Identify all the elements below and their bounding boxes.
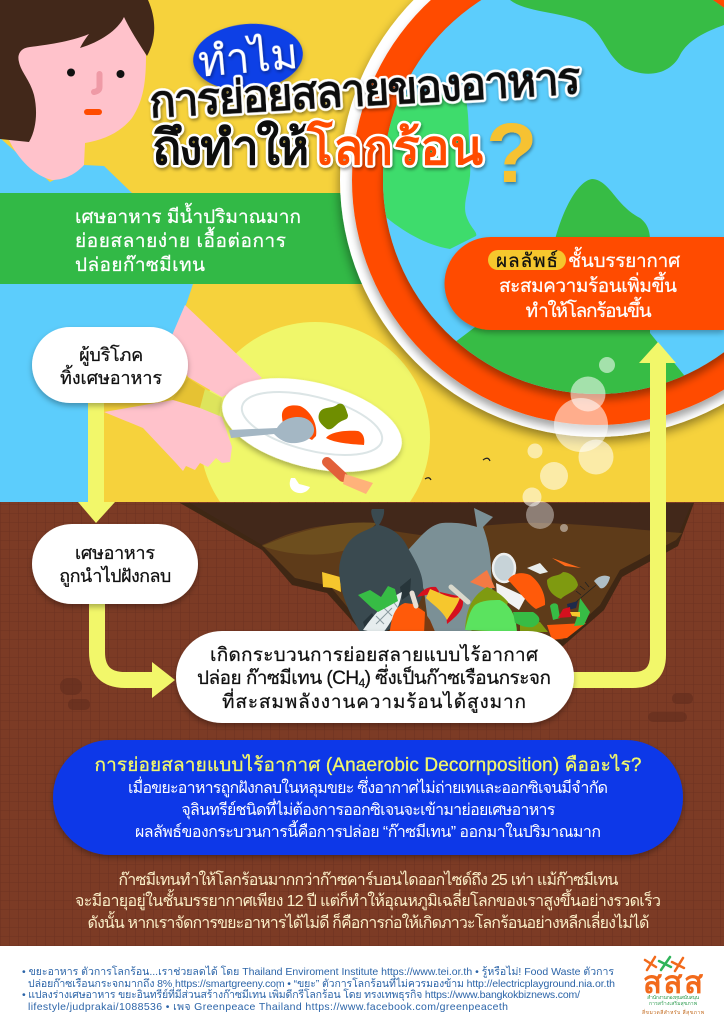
food: orange piece xyxy=(326,431,364,445)
garbage pile xyxy=(322,508,610,640)
text: landfill xyxy=(59,543,171,587)
band: green text panel xyxy=(0,193,370,284)
green veg xyxy=(550,598,590,626)
logo stars xyxy=(645,957,684,971)
heading: การย่อยสลายแบบไร้อากาศ (Anaerobic Decornposition) คืออะไร? xyxy=(94,754,642,776)
title line 2 xyxy=(152,119,483,175)
black garbage bag xyxy=(339,509,423,634)
text: food waste description: เศษอาหาร มีน้ำปริมาณมาก xyxy=(75,203,301,228)
text: result: สะสมความร้อนเพิ่มขึ้น xyxy=(499,272,677,297)
body: ผลลัพธ์ของกระบวนการนี้คือการปล่อย “ก๊าซมีเทน” ออกมาในปริมาณมาก xyxy=(135,820,601,841)
apple core xyxy=(426,589,460,620)
text: anaerobic process: ปล่อย ก๊าซมีเทน (CH xyxy=(197,668,359,689)
green leaf xyxy=(358,586,398,612)
face and neck xyxy=(0,16,146,180)
title pill: why xyxy=(190,19,306,95)
grey garbage bag xyxy=(408,508,493,640)
can lid xyxy=(493,554,515,582)
pit brown interior xyxy=(262,523,682,640)
olive lump xyxy=(465,587,508,632)
fish tail xyxy=(400,578,411,600)
text: anaerobic process xyxy=(197,644,551,713)
text: food waste description xyxy=(75,203,301,276)
background: soil xyxy=(0,502,724,946)
text: result xyxy=(496,247,680,322)
logo wordmark: สสส xyxy=(643,965,703,1000)
yellow scrap small xyxy=(570,612,580,617)
box: consumer xyxy=(32,327,188,403)
text block: methane facts: ดังนั้น หากเราจัดการขยะอาหารได้ไม่ดี ก็คือการก่อให้เกิดภาวะโลกร้อนอย่างหลีกเลี่ยงไม่ได้ xyxy=(87,911,649,932)
text: result: ทำให้โลกร้อนขึ้น xyxy=(526,297,652,322)
text: consumer xyxy=(60,344,162,388)
arrow: up to earth xyxy=(560,342,676,680)
gap behind arm xyxy=(172,378,205,408)
eye right xyxy=(116,70,124,78)
eggshell xyxy=(290,478,310,493)
fish head xyxy=(594,576,610,588)
earth red ring xyxy=(352,0,724,425)
text: landfill: ถูกนำไปฝังกลบ xyxy=(59,565,171,587)
orange chip xyxy=(470,570,495,588)
spoon xyxy=(229,417,314,443)
logo: ThaiHealth xyxy=(642,957,704,1016)
bubbles: methane xyxy=(522,357,615,532)
arm and hand xyxy=(104,305,262,471)
pumpkin stem xyxy=(412,593,416,606)
upper arm xyxy=(170,305,262,397)
title pill: why: ทำไม xyxy=(196,30,300,85)
question mark: ? xyxy=(486,106,537,200)
text: anaerobic process: ) ซึ่งเป็นก๊าซเรือนกระจก xyxy=(365,664,551,689)
yellow scrap xyxy=(322,572,341,592)
text: consumer: ทิ้งเศษอาหาร xyxy=(60,365,162,388)
text block: methane facts: ก๊าซมีเทนทำให้โลกร้อนมากกว่าก๊าซคาร์บอนไดออกไซด์ถึง 25 เท่า แม้ก๊าซมีเทน xyxy=(118,870,618,889)
pit in the ground xyxy=(180,503,694,646)
white scrap xyxy=(527,563,548,574)
green leaf small xyxy=(513,612,539,627)
hair xyxy=(0,0,154,142)
food: orange slice xyxy=(282,405,316,440)
orange bottom chunk xyxy=(547,623,586,640)
brown strip xyxy=(420,606,436,634)
bone xyxy=(451,587,468,602)
text: food waste description: ปล่อยก๊าซมีเทน xyxy=(75,254,205,276)
fish skeleton xyxy=(576,582,596,602)
result pill xyxy=(488,250,566,270)
text: anaerobic process: ที่สะสมพลังงานความร้อนได้สูงมาก xyxy=(222,688,526,713)
arrow: waste to decomposition xyxy=(97,600,175,698)
plate inner ring xyxy=(236,380,388,467)
arrow: consumer to waste xyxy=(78,400,115,523)
panel: result xyxy=(445,237,724,330)
pit dark interior xyxy=(190,503,692,640)
title line 2: โลกร้อน xyxy=(306,119,483,175)
text: anaerobic process: เกิดกระบวนการย่อยสลายแบบไร้อากาศ xyxy=(210,644,538,666)
pit rim xyxy=(180,503,694,646)
background: sky yellow xyxy=(0,0,724,503)
title line 2: ถึงทำให้ xyxy=(152,119,309,175)
earth ocean xyxy=(383,0,724,394)
text: food waste description: ย่อยสลายง่าย เอื้อต่อการ xyxy=(75,227,286,252)
footer references: • ขยะอาหาร ตัวการโลกร้อน...เราช่วยลดได้ โดย Thailand Enviroment Institute https://www.tei.or.th • รู้หรือไม่! Food Waste ตัวการ xyxy=(22,965,614,978)
logo caption: สำนักงานกองทุนสนับสนุน xyxy=(647,995,700,1001)
text block: methane facts xyxy=(75,870,661,932)
navy scrap xyxy=(567,601,578,610)
red scrap xyxy=(558,607,571,618)
pit lighter lens xyxy=(262,522,377,555)
eye left xyxy=(67,68,75,76)
panel: anaerobic decomposition explanation xyxy=(53,740,683,855)
fish xyxy=(363,592,402,634)
footer references: • แปลงร่างเศษอาหาร ขยะอินทรีย์ที่มีส่วนสร้างก๊าซมีเทน เพิ่มดีกรีโลกร้อน โดย ทรงเทพธุรกิจ https://www.bangkokbiznews.com/ xyxy=(22,987,580,1001)
background: footer xyxy=(0,946,724,1024)
footer references: ปล่อยก๊าซเรือนกระจกมากถึง 8% https://smartgreeny.com • “ขยะ” ตัวการโลกร้อนที่ไม่ควรมองข้าม http://electricplayground.nia.or.th xyxy=(28,976,615,990)
food: green vegetable xyxy=(319,404,348,429)
text: result: ชั้นบรรยากาศ xyxy=(568,247,680,272)
plate with leftovers xyxy=(212,362,412,494)
text: consumer: ผู้บริโภค xyxy=(79,344,143,366)
shrimp xyxy=(327,462,343,477)
text: landfill: เศษอาหาร xyxy=(75,543,155,563)
apple skin xyxy=(417,587,463,624)
nose xyxy=(94,74,100,92)
orange pumpkin xyxy=(388,603,425,634)
olive food xyxy=(547,572,578,599)
body: จุลินทรีย์ชนิดที่ไม่ต้องการออกซิเจนจะเข้ามาย่อยเศษอาหาร xyxy=(181,798,556,820)
shrimp tail xyxy=(343,474,373,494)
title line 1: การย่อยสลายของอาหาร xyxy=(148,54,582,127)
decoration: flies xyxy=(425,458,490,480)
soil patches xyxy=(60,678,693,722)
logo caption: สี่ขมวดสีสำหรับ สี่สุขภาพ xyxy=(642,1009,704,1016)
can body xyxy=(496,583,526,610)
panel: blue backdrop behind consumer xyxy=(0,138,193,502)
fish fin xyxy=(363,613,378,632)
orange sliver xyxy=(552,558,581,568)
orange food large xyxy=(508,573,545,609)
olive low xyxy=(520,622,548,632)
continents xyxy=(380,0,724,420)
hand xyxy=(104,400,232,471)
box: landfill xyxy=(32,524,198,604)
green lettuce xyxy=(465,600,517,632)
gap light xyxy=(200,389,222,418)
light yellow circle behind plate xyxy=(204,322,430,502)
illustration: earth xyxy=(340,0,724,437)
plate xyxy=(212,362,412,488)
title xyxy=(148,19,582,200)
logo caption: การสร้างเสริมสุขภาพ xyxy=(649,1000,697,1007)
footer references: lifestyle/judprakai/1088536 • เพจ Greenpeace Thailand https://www.facebook.com/greenpeaceth xyxy=(28,1001,508,1013)
body xyxy=(128,776,608,841)
mouth xyxy=(87,109,99,115)
earth white rim xyxy=(340,0,724,437)
fish marks xyxy=(376,600,398,624)
box: anaerobic process xyxy=(176,631,574,723)
text: anaerobic process: 4 xyxy=(359,676,366,690)
text: result: ผลลัพธ์ xyxy=(496,250,558,272)
text block: methane facts: จะมีอายุอยู่ในชั้นบรรยากาศเพียง 12 ปี แต่ก็ทำให้อุณหภูมิเฉลี่ยโลกของเราสูงขึ้นอย่างรวดเร็ว xyxy=(75,889,661,911)
logo caption xyxy=(642,995,704,1016)
illustration: woman xyxy=(0,0,154,180)
footer references xyxy=(22,965,615,1013)
body: เมื่อขยะอาหารถูกฝังกลบในหลุมขยะ ซึ่งอากาศไม่ถ่ายเทและออกซิเจนมีจำกัด xyxy=(128,776,608,798)
